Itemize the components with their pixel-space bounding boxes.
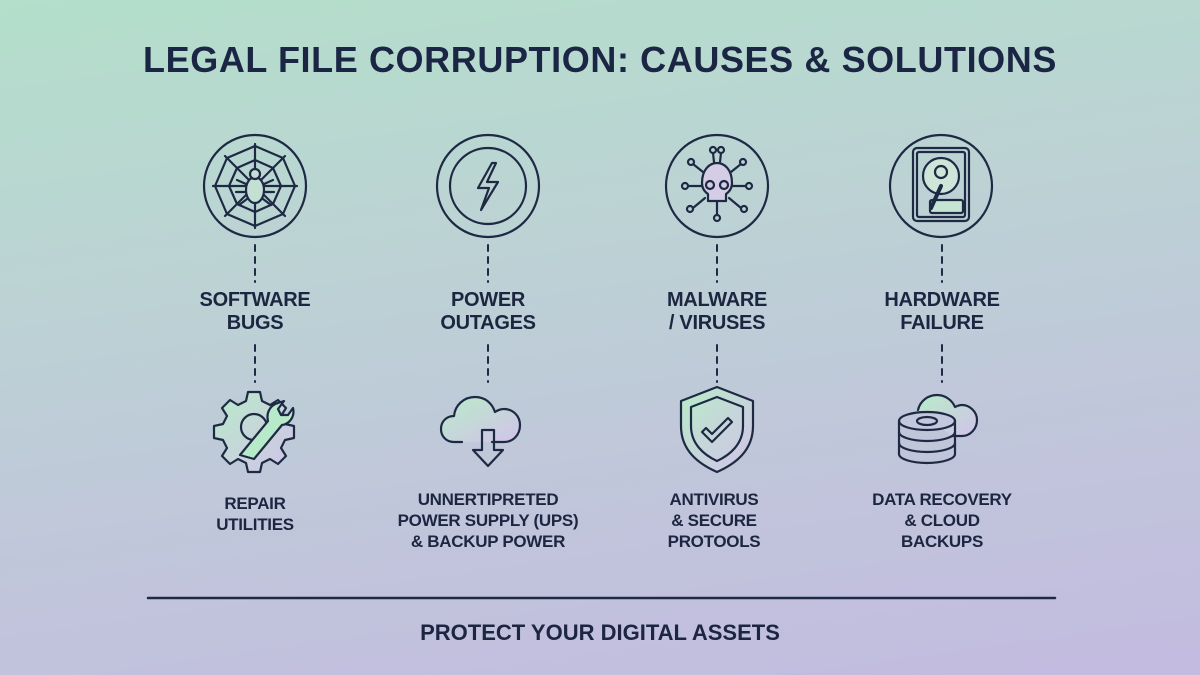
- icon: disks and cloud: [899, 395, 977, 463]
- cause label: malware: [667, 289, 767, 334]
- cause label: software bugs: BUGS: [227, 312, 283, 334]
- solution: repair utilities: UTILITIES: [216, 515, 294, 534]
- cause label: hardware failure: [884, 289, 1000, 334]
- solution: UPS: [398, 490, 578, 551]
- solution: repair utilities: [216, 494, 294, 534]
- solution: antivirus: [668, 490, 760, 551]
- icon: lightning: [437, 135, 539, 237]
- solution: data recovery: & CLOUD: [904, 511, 980, 530]
- icon: shield check: [681, 387, 753, 472]
- solution: antivirus: PROTOOLS: [668, 532, 760, 551]
- solution: UPS: & BACKUP POWER: [411, 532, 565, 551]
- divider line: [148, 597, 1055, 599]
- icon: skull virus: [666, 135, 768, 237]
- solution: repair utilities: REPAIR: [224, 494, 286, 513]
- cause label: malware: MALWARE: [667, 289, 767, 311]
- solution: data recovery: BACKUPS: [901, 532, 983, 551]
- footer tagline: PROTECT YOUR DIGITAL ASSETS: [420, 620, 780, 645]
- icon: cloud download: [441, 397, 520, 466]
- cause label: power outages: POWER: [451, 289, 525, 311]
- cause label: power outages: OUTAGES: [440, 312, 536, 334]
- icon: gear wrench: [214, 392, 294, 472]
- cause label: hardware failure: HARDWARE: [884, 289, 1000, 311]
- cause label: software bugs: [200, 289, 310, 334]
- solution: data recovery: [872, 490, 1012, 551]
- icon: spider web bug: [204, 135, 306, 237]
- solution: UPS: UNNERTIPRETED: [418, 490, 558, 509]
- solution: antivirus: ANTIVIRUS: [670, 490, 758, 509]
- solution: UPS: POWER SUPPLY (UPS): [398, 511, 578, 530]
- cause label: power outages: [440, 289, 536, 334]
- cause label: software bugs: SOFTWARE: [200, 289, 310, 311]
- solution: data recovery: DATA RECOVERY: [872, 490, 1012, 509]
- cause label: malware: / VIRUSES: [669, 312, 765, 334]
- title: LEGAL FILE CORRUPTION: CAUSES & SOLUTIONS: [143, 39, 1057, 80]
- dashed connectors: [255, 245, 942, 382]
- solution: antivirus: & SECURE: [671, 511, 757, 530]
- cause label: hardware failure: FAILURE: [900, 312, 984, 334]
- icon: hard drive: [890, 135, 992, 237]
